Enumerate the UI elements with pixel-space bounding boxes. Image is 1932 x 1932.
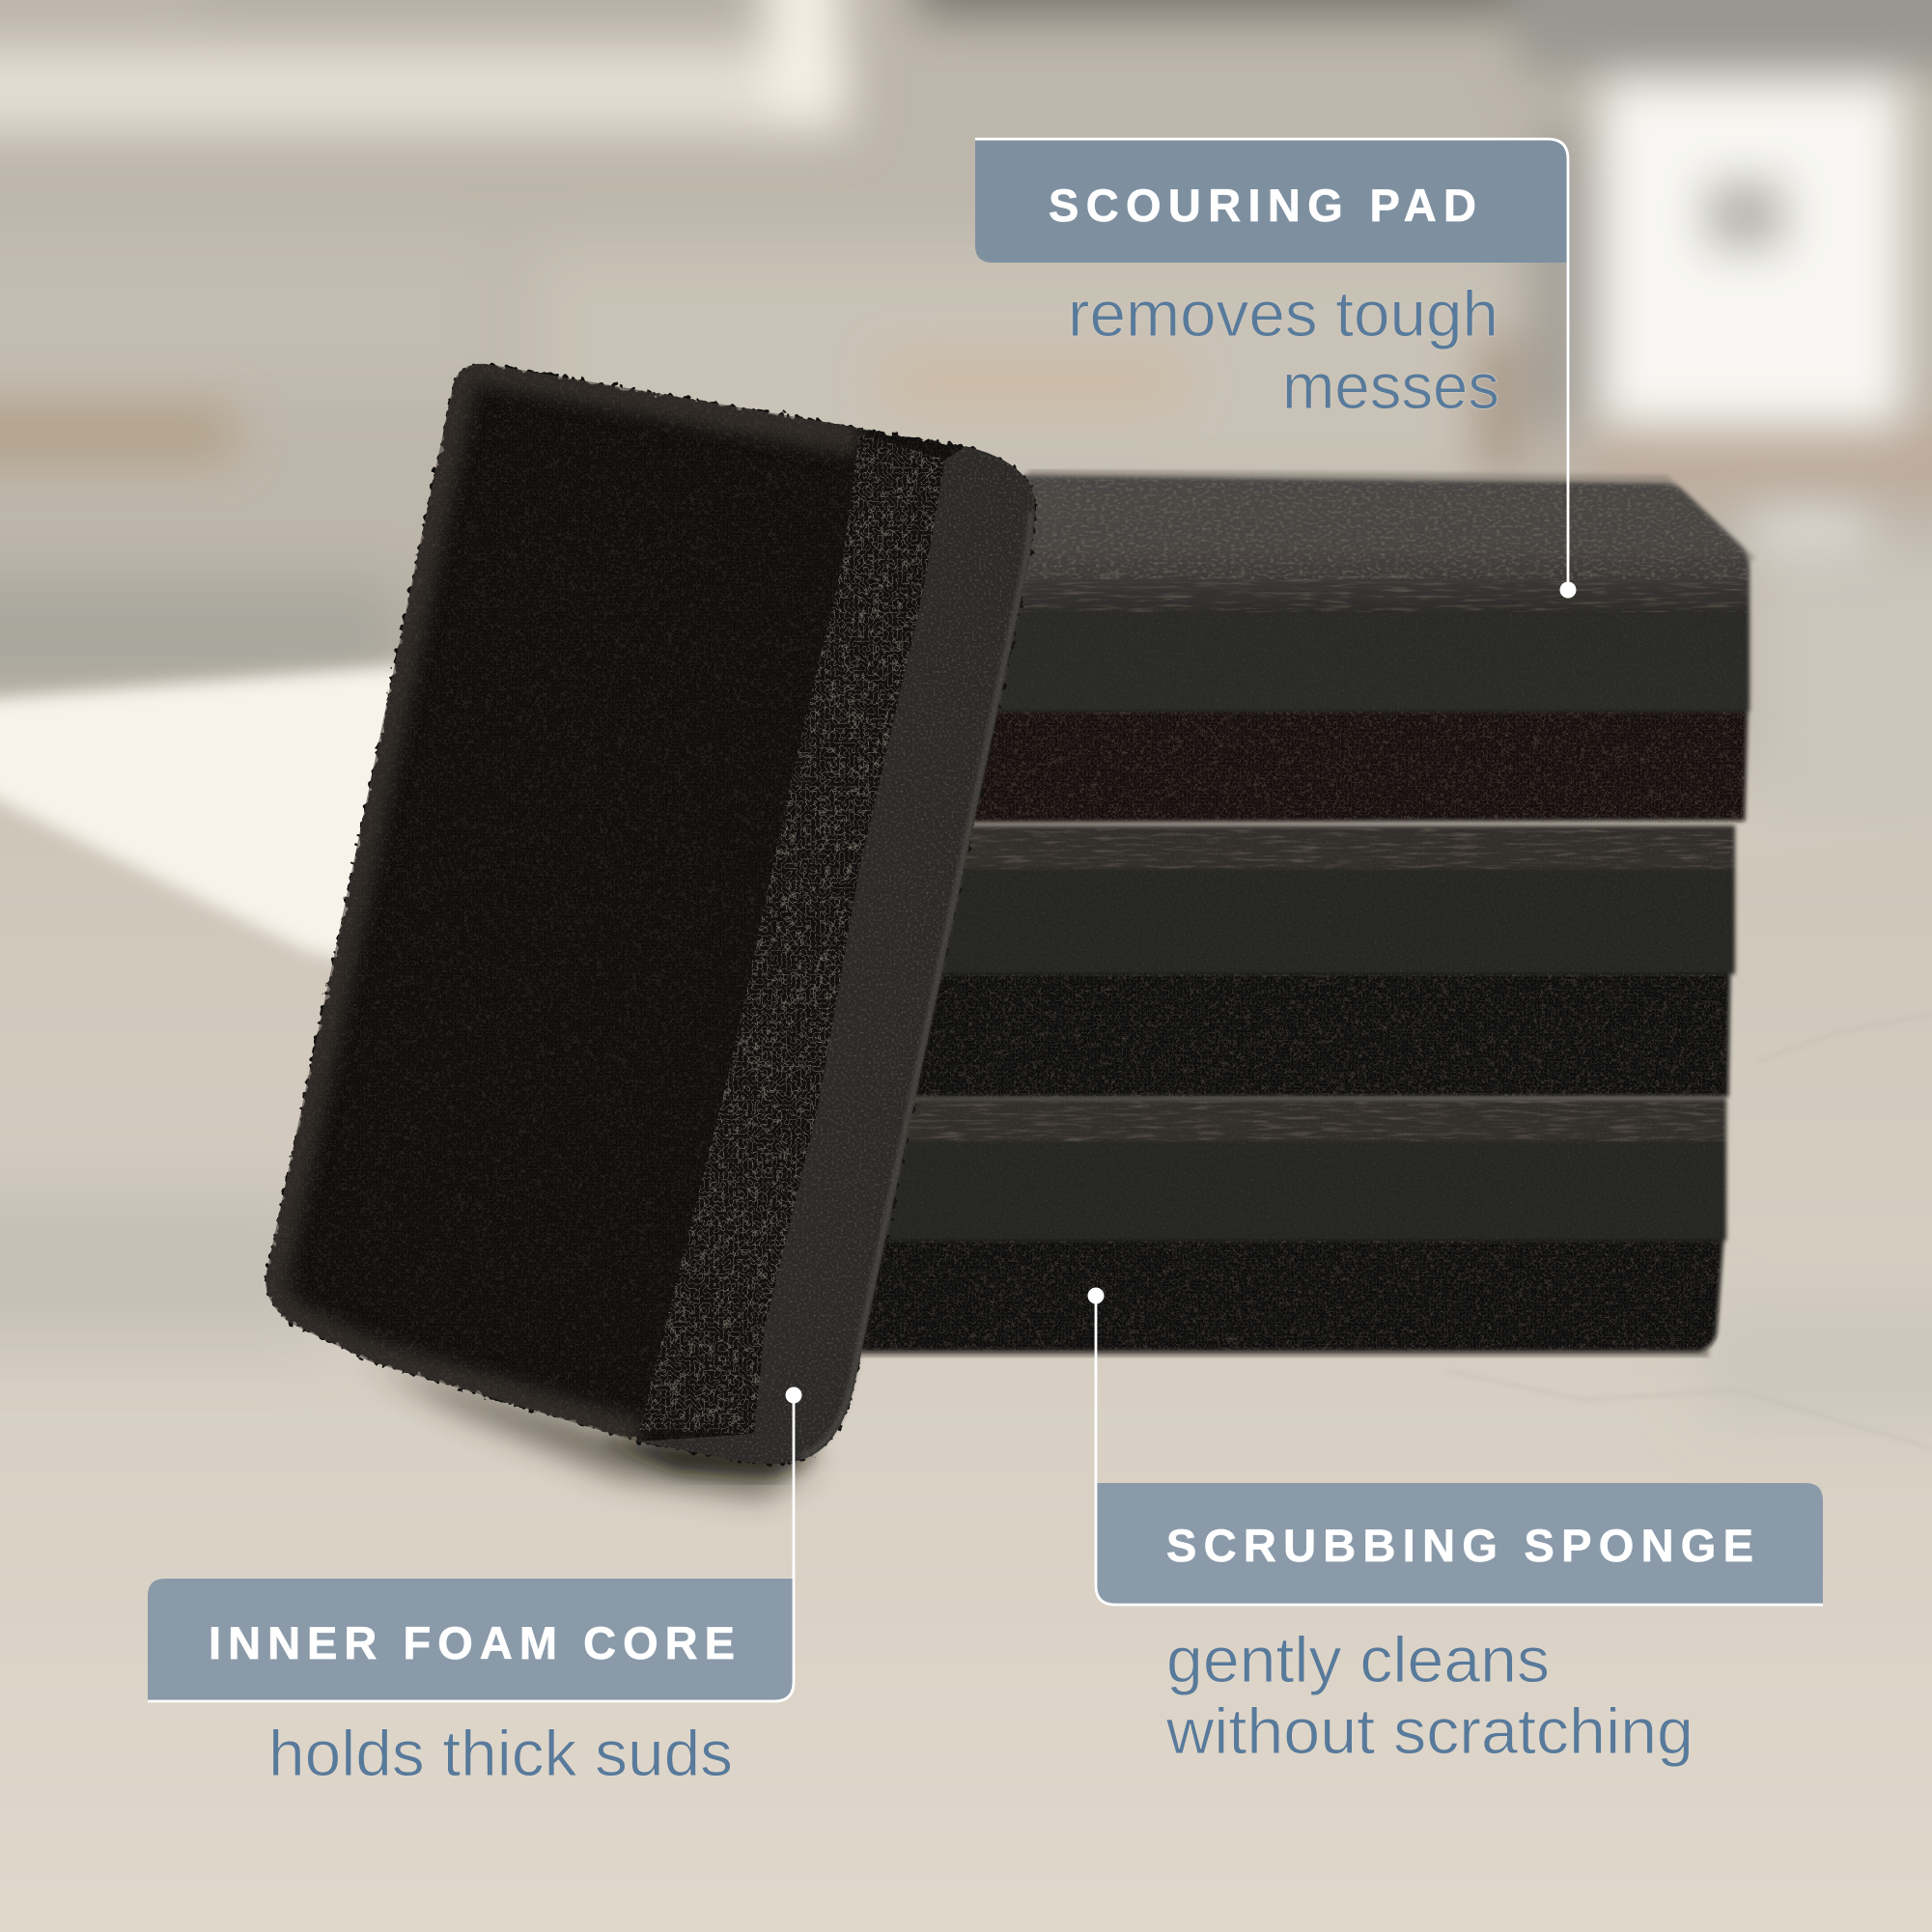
side foam band: [628, 434, 1043, 1477]
dark face edge glow: [266, 364, 859, 1442]
callout: inner foam core: [148, 1386, 801, 1790]
mesh band: [639, 434, 945, 1434]
callout: scouring pad: [975, 139, 1576, 599]
scrubbing sponge description: [1165, 1624, 1694, 1768]
callout: scrubbing sponge: [1087, 1288, 1823, 1768]
scrubbing sponge description: gently cleans: [1166, 1624, 1550, 1696]
scrubbing sponge description: without scratching: [1165, 1695, 1694, 1768]
inner foam core heading: INNER FOAM CORE: [209, 1617, 735, 1668]
scouring pad description: [1068, 278, 1499, 423]
scouring pad description: removes tough: [1068, 278, 1498, 350]
leaning sponge: [251, 348, 1043, 1477]
scrubbing sponge label panel: [1097, 1483, 1823, 1605]
inner foam core label panel: [148, 1579, 793, 1701]
leader line and dot: [1087, 1288, 1823, 1605]
stack of three sponges: [850, 473, 1757, 1361]
sponge 2: layers: [908, 826, 1735, 1098]
sponge 3: layers: [850, 1099, 1726, 1352]
scouring pad label panel: [975, 139, 1567, 263]
leader line and dot: [975, 139, 1576, 599]
dark face cell texture: [251, 348, 1043, 1477]
leader line and dot: [148, 1386, 801, 1701]
haze on top edge: [1028, 473, 1752, 560]
inner foam core description: holds thick suds: [268, 1718, 733, 1790]
scouring pad description: messes: [1282, 350, 1499, 423]
scouring pad heading: SCOURING PAD: [1049, 180, 1476, 231]
sponge 1: layers: [956, 612, 1750, 823]
sponge shadow on counter: [370, 1348, 1709, 1497]
sponge 1: scouring top surface: [994, 475, 1750, 614]
scrubbing sponge heading: SCRUBBING SPONGE: [1166, 1520, 1753, 1571]
